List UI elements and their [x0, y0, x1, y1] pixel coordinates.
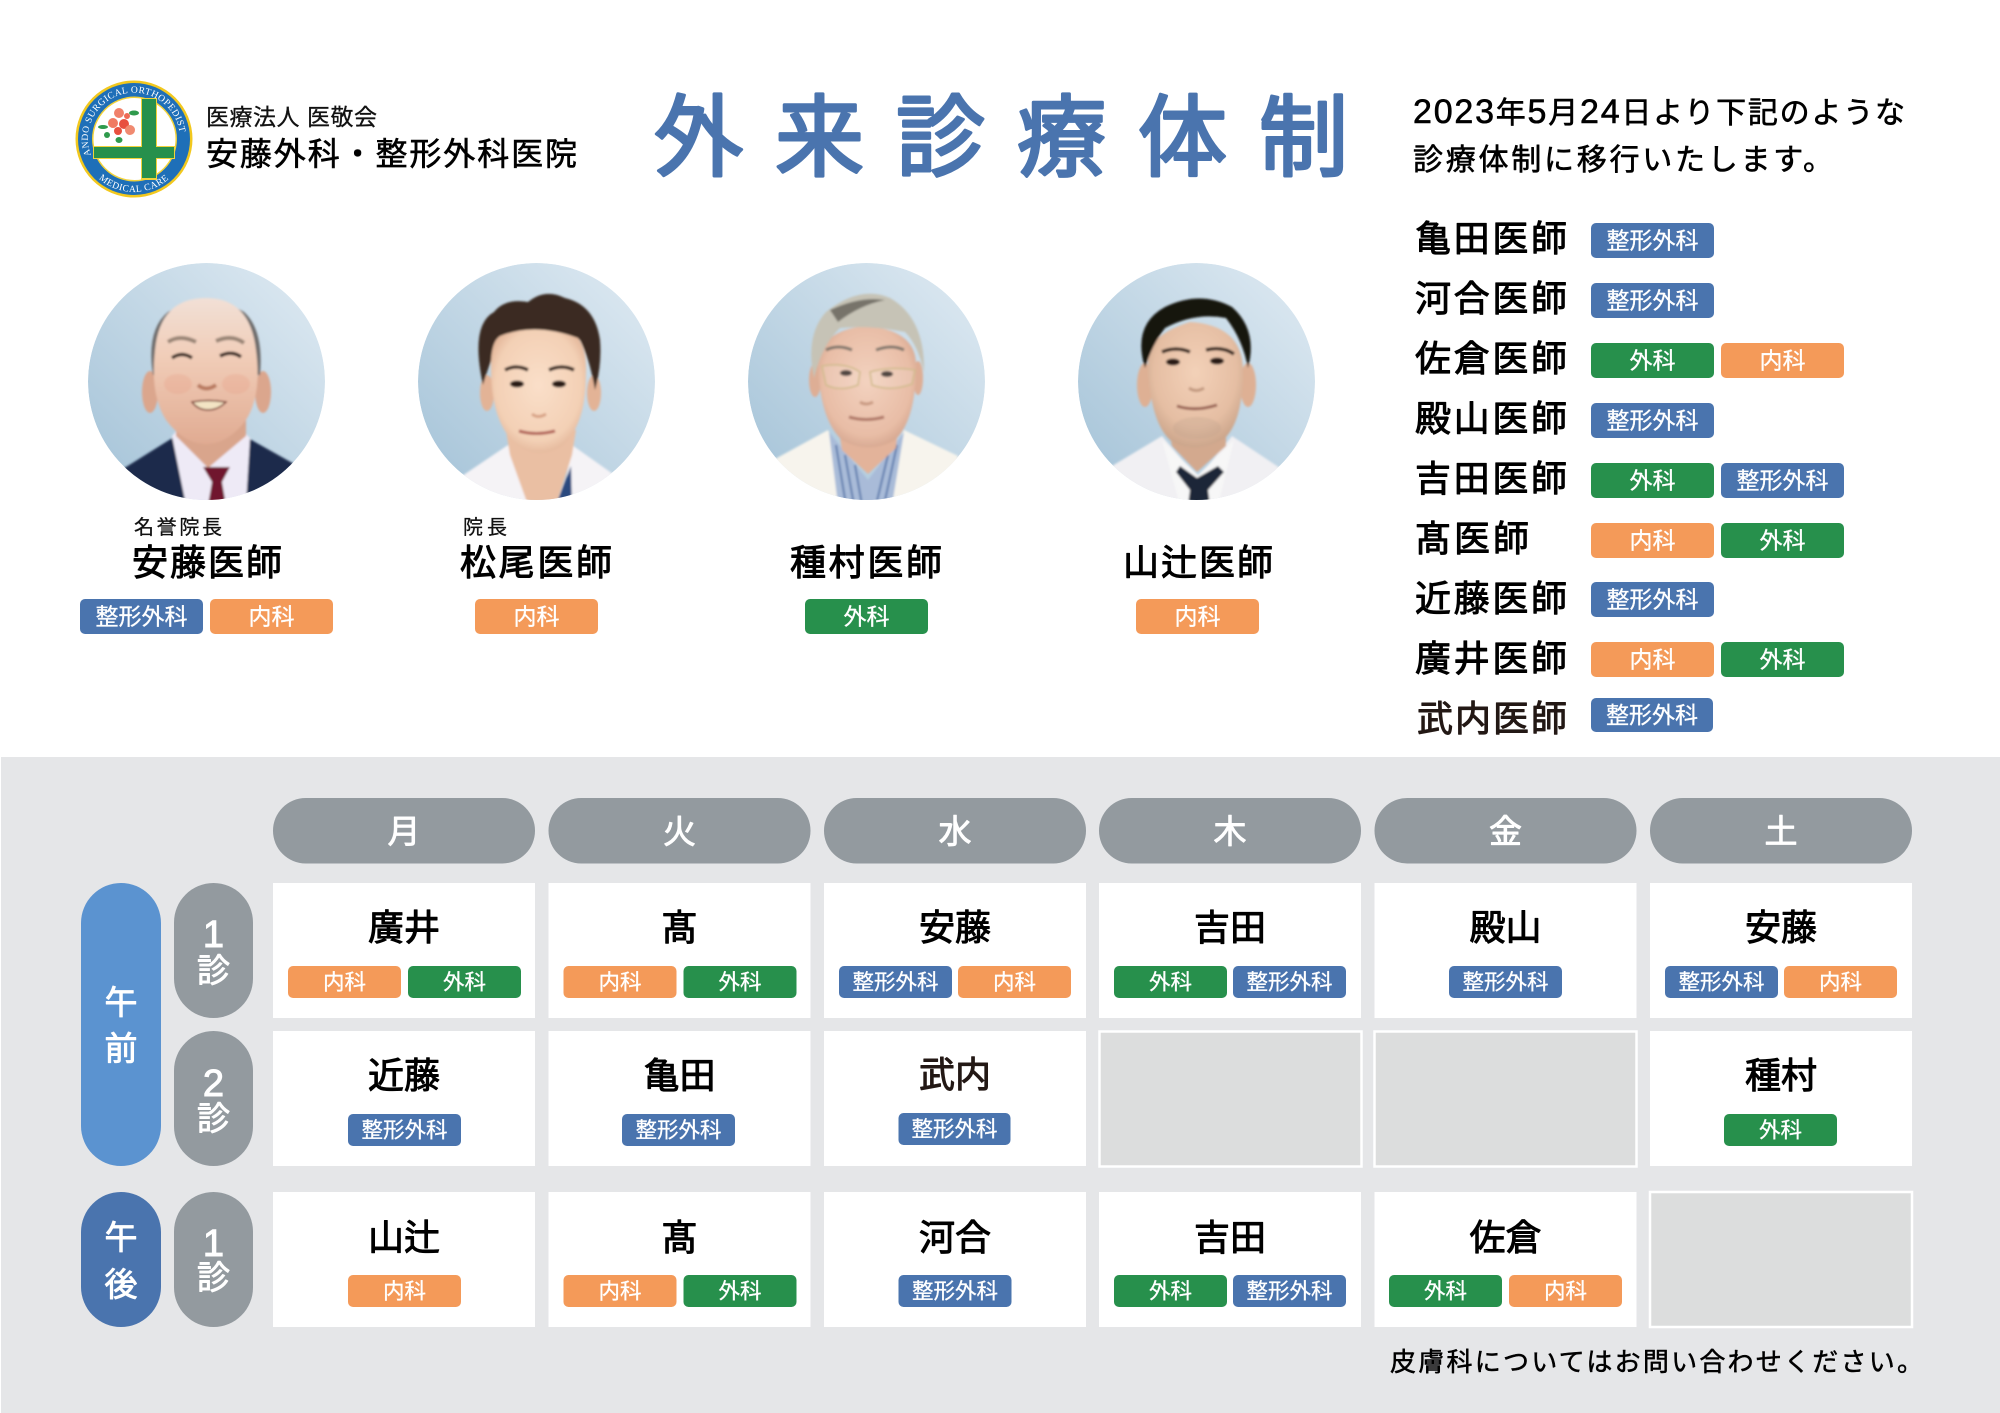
intro text: 診療体制に移行いたします。	[1413, 144, 1833, 177]
cell: 火 午前2診 亀田	[548, 1031, 810, 1166]
portrait: 種村	[748, 263, 985, 510]
doctor: 吉田: 整形外科	[1736, 468, 1828, 494]
clinic name: 医療法人 医敬会	[206, 104, 377, 130]
period: 午前: 前	[104, 1030, 138, 1067]
profile: 安藤: 名誉院長	[134, 516, 222, 539]
cell: 火 午前2診 亀田: 亀田	[643, 1055, 716, 1096]
cell: 水 午前1診 安藤: 内科	[993, 970, 1036, 994]
day header: 木: 木	[1214, 813, 1246, 850]
doctor: 佐倉: 佐倉医師	[1415, 338, 1567, 379]
logo: MEDICAL CARE	[98, 174, 168, 192]
profile: 安藤: 整形外科	[96, 604, 188, 630]
cell: 土 午前2診 種村	[1650, 1031, 1912, 1166]
portrait: 山辻	[1078, 263, 1315, 510]
cell: 月 午前2診 近藤: 整形外科	[361, 1118, 448, 1142]
cell: 金 午後1診 佐倉: 内科	[1544, 1280, 1587, 1304]
cell: 月 午後1診 山辻	[273, 1192, 535, 1327]
profile: 松尾	[460, 516, 612, 634]
cell: 水 午後1診 河合: 河合	[919, 1217, 991, 1258]
cell: 月 午前1診 廣井: 内科	[323, 970, 366, 994]
doctor: 吉田: 外科	[1630, 468, 1676, 494]
doctor: 河合: 整形外科	[1606, 288, 1698, 314]
portrait: 安藤	[88, 263, 325, 505]
cell: 月 午前2診 近藤	[273, 1031, 535, 1166]
logo	[76, 80, 192, 198]
doctor: 髙: 内科	[1630, 528, 1676, 554]
cell: 火 午前1診 髙: 外科	[718, 970, 762, 994]
cell: 土 午前1診 安藤: 整形外科	[1678, 970, 1765, 994]
intro text	[1413, 93, 1905, 177]
doctor: 髙: 外科	[1760, 528, 1806, 554]
profile: 種村	[790, 542, 942, 634]
cell: 火 午後1診 髙	[548, 1192, 810, 1327]
profile: 松尾: 松尾医師	[460, 542, 612, 583]
doctor: 亀田	[1415, 218, 1714, 259]
profile: 種村: 外科	[844, 604, 890, 630]
doctor: 河合: 河合医師	[1415, 278, 1567, 319]
cell: 水 午前1診 安藤: 整形外科	[852, 970, 939, 994]
doctor: 近藤	[1415, 578, 1714, 619]
day header: 水: 水	[938, 813, 972, 850]
doctor: 近藤: 整形外科	[1606, 586, 1698, 612]
doctor: 武内	[1417, 698, 1713, 739]
cell: 水 午前2診 武内	[824, 1031, 1086, 1166]
cell: 木 午前1診 吉田: 整形外科	[1246, 970, 1333, 994]
period: 午前	[81, 883, 161, 1166]
cell: 月 午前2診 近藤: 近藤	[368, 1055, 440, 1096]
cell: 水 午前1診 安藤	[824, 883, 1086, 1018]
session: 午後1診: 診	[197, 1259, 230, 1296]
title: 外来診療体制	[654, 88, 1348, 188]
intro text: 2023年5月24日より下記のような	[1413, 93, 1905, 131]
doctor: 佐倉: 内科	[1760, 348, 1806, 374]
day header: 月: 月	[388, 813, 420, 850]
cell: 金 午前2診 empty	[1374, 1032, 1636, 1166]
cell: 木 午後1診 吉田: 外科	[1149, 1280, 1192, 1304]
day header: 水	[824, 798, 1086, 864]
cell: 火 午後1診 髙: 髙	[661, 1217, 698, 1258]
session: 午前1診: 1	[203, 914, 224, 956]
cell: 水 午後1診 河合	[824, 1192, 1086, 1327]
logo: ANDO SURGICAL ORTHOPEDIST	[82, 86, 186, 156]
doctor: 佐倉	[1415, 338, 1844, 379]
doctor: 河合	[1415, 278, 1714, 319]
period: 午前: 午	[104, 984, 138, 1021]
day header: 土	[1650, 798, 1912, 864]
cell: 木 午後1診 吉田: 整形外科	[1246, 1280, 1333, 1304]
cell: 土 午前2診 種村: 種村	[1745, 1055, 1817, 1096]
cell: 火 午後1診 髙: 内科	[598, 1280, 642, 1304]
cell: 水 午後1診 河合: 整形外科	[912, 1280, 998, 1304]
doctor: 廣井: 外科	[1760, 646, 1806, 672]
cell: 水 午前1診 安藤: 安藤	[919, 907, 991, 948]
doctor: 吉田	[1415, 458, 1844, 499]
footnote: 皮膚科についてはお問い合わせください。	[1390, 1347, 1923, 1377]
profile: 山辻: 山辻医師	[1123, 542, 1273, 583]
doctor: 吉田: 吉田医師	[1415, 458, 1567, 499]
clinic name: 安藤外科・整形外科医院	[206, 136, 577, 172]
cell: 木 午後1診 吉田: 吉田	[1194, 1217, 1266, 1258]
session: 午前1診: 診	[197, 952, 230, 989]
cell: 金 午前1診 殿山: 殿山	[1469, 907, 1542, 948]
panel: schedule background	[1, 757, 2000, 1413]
period: 午後: 午	[104, 1219, 138, 1256]
doctor: 髙	[1415, 518, 1844, 559]
cell: 水 午前2診 武内: 武内	[919, 1054, 991, 1095]
cell: 月 午前1診 廣井	[273, 883, 535, 1018]
day header: 月	[273, 798, 535, 864]
cell: 土 午前1診 安藤	[1650, 883, 1912, 1018]
profile: 安藤	[80, 516, 333, 634]
cell: 土 午前1診 安藤: 安藤	[1745, 907, 1817, 948]
cell: 月 午前1診 廣井: 外科	[443, 970, 486, 994]
session: 午前2診: 2	[203, 1063, 224, 1105]
session: 午前1診	[174, 883, 253, 1018]
profile: 松尾: 内科	[514, 604, 560, 630]
period: 午後: 後	[104, 1266, 138, 1303]
profile: 安藤: 内科	[248, 604, 294, 630]
session: 午前2診	[174, 1031, 253, 1166]
doctor: 殿山	[1415, 398, 1714, 439]
cell: 木 午後1診 吉田	[1099, 1192, 1361, 1327]
doctor: 髙: 髙医師	[1415, 518, 1529, 559]
cell: 水 午前2診 武内: 整形外科	[911, 1118, 998, 1142]
cell: 木 午前1診 吉田	[1099, 883, 1361, 1018]
day header: 火: 火	[663, 813, 696, 850]
doctor: 武内: 整形外科	[1606, 702, 1698, 728]
profile: 松尾: 院長	[463, 516, 507, 539]
profile: 種村: 種村医師	[790, 542, 942, 583]
doctor: 廣井: 廣井医師	[1415, 638, 1567, 679]
clinic name	[206, 104, 577, 172]
cell: 金 午後1診 佐倉: 外科	[1424, 1280, 1467, 1304]
period: 午後	[81, 1192, 161, 1327]
session: 午後1診: 1	[203, 1223, 224, 1265]
session: 午前2診: 診	[197, 1100, 230, 1137]
cell: 金 午前1診 殿山: 整形外科	[1462, 970, 1549, 994]
cell: 木 午前1診 吉田: 吉田	[1194, 907, 1266, 948]
doctor: 亀田: 亀田医師	[1415, 218, 1567, 259]
doctor: 廣井: 内科	[1630, 646, 1676, 672]
doctor: 亀田: 整形外科	[1606, 228, 1698, 254]
day header: 土: 土	[1764, 813, 1798, 850]
cell: 土 午前2診 種村: 外科	[1759, 1118, 1802, 1142]
cell: 火 午前1診 髙: 髙	[661, 907, 698, 948]
cell: 土 午後1診 empty	[1650, 1192, 1912, 1327]
day header: 金: 金	[1489, 813, 1522, 850]
day header: 火	[548, 798, 810, 864]
doctor: 武内: 武内医師	[1417, 698, 1567, 739]
doctor: 近藤: 近藤医師	[1415, 578, 1567, 619]
session: 午後1診	[174, 1192, 253, 1327]
cell: 金 午後1診 佐倉: 佐倉	[1469, 1217, 1542, 1258]
profile: 山辻	[1123, 542, 1273, 634]
cell: 火 午前1診 髙	[548, 883, 810, 1018]
cell: 火 午前2診 亀田: 整形外科	[635, 1118, 722, 1142]
cell: 月 午後1診 山辻: 内科	[383, 1280, 426, 1304]
cell: 火 午後1診 髙: 外科	[718, 1280, 762, 1304]
profile: 安藤: 安藤医師	[132, 542, 282, 583]
doctor: 殿山: 整形外科	[1606, 408, 1698, 434]
doctor: 廣井	[1415, 638, 1844, 679]
cell: 木 午前1診 吉田: 外科	[1149, 970, 1192, 994]
cell: 木 午前2診 empty	[1100, 1032, 1362, 1166]
doctor: 殿山: 殿山医師	[1415, 398, 1567, 439]
cell: 土 午前1診 安藤: 内科	[1819, 970, 1862, 994]
doctor: 佐倉: 外科	[1630, 348, 1676, 374]
cell: 火 午前1診 髙: 内科	[598, 970, 642, 994]
cell: 金 午後1診 佐倉	[1374, 1192, 1636, 1327]
day header: 金	[1374, 798, 1636, 864]
cell: 月 午後1診 山辻: 山辻	[368, 1217, 440, 1258]
cell: 月 午前1診 廣井: 廣井	[368, 907, 440, 948]
portrait: 松尾	[418, 263, 655, 510]
day header: 木	[1099, 798, 1361, 864]
cell: 金 午前1診 殿山	[1374, 883, 1636, 1018]
doctor list	[1415, 218, 1844, 739]
profile: 山辻: 内科	[1174, 604, 1220, 630]
